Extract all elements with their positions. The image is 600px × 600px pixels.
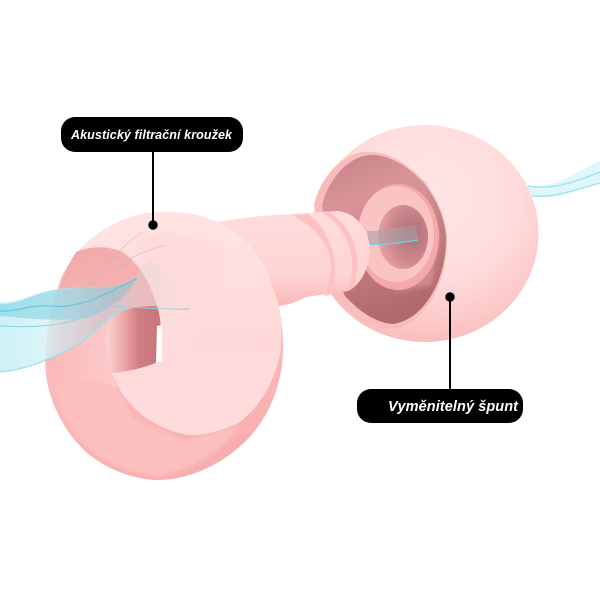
callout: Vyměnitelný špunt [357,292,523,423]
ring left inner wall [46,247,157,358]
leader line [449,297,451,391]
ring funnel shade [128,231,224,363]
stem rib two [323,212,357,290]
label pill [61,117,243,152]
leader dot [148,220,158,230]
pale veil [0,258,192,372]
earplug: replaceable tip [312,125,538,342]
wave strands [0,278,137,311]
label text: Akustický filtrační kroužek [70,128,233,142]
ring hole [106,306,161,373]
inner bore [378,205,428,269]
wave: left air stream [0,232,192,372]
label pill [357,389,523,423]
inner shaft [395,181,440,292]
earplug: stem [218,211,370,308]
hole opening [156,325,162,363]
callout: Akustický filtrační kroužek [61,117,243,230]
air stream through bore [367,225,418,245]
stem rib one [292,214,335,296]
wave: right air stream [526,161,600,197]
ring lower face [55,342,240,476]
label text: Vyměnitelný špunt [388,399,519,415]
leader line [152,150,154,225]
inner cylinder [357,184,439,290]
ring left lower face [46,316,117,388]
ring outer body [45,212,283,480]
ring light face [77,212,282,435]
earplug: acoustic filter ring [45,212,283,480]
leader dot [445,292,455,302]
cavity [322,155,446,324]
saturated band [0,278,137,320]
ball body [312,125,538,342]
ball inner rim [314,152,447,329]
